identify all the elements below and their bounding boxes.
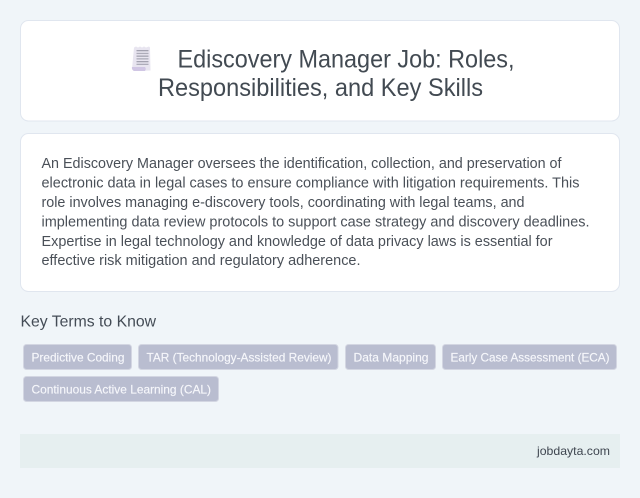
- footer bar: [20, 434, 620, 468]
- title: Responsibilities, and Key Skills: [158, 74, 483, 102]
- panel: description card: [20, 134, 620, 292]
- title: Ediscovery Manager Job: Roles,: [178, 46, 514, 74]
- text block: description: Expertise in legal technology and knowledge of data privacy laws is essential for: [42, 234, 553, 250]
- text block: description: electronic data in legal cases to ensure compliance with litigation requirements. This: [42, 176, 580, 192]
- tag: data mapping: Data Mapping: [354, 350, 428, 364]
- tag: predictive coding: [24, 344, 132, 370]
- text block: description: [42, 156, 590, 269]
- title: [158, 46, 514, 102]
- text block: description: effective risk mitigation and regulatory adherence.: [42, 253, 360, 269]
- tag: TAR: TAR (Technology-Assisted Review): [146, 350, 332, 364]
- tag: continuous active learning: [24, 376, 218, 402]
- heading: key terms: Key Terms to Know: [20, 314, 156, 331]
- tag: TAR: [138, 344, 338, 370]
- text block: description: role involves managing e-discovery tools, coordinating with legal teams, and: [42, 195, 524, 211]
- text block: description: An Ediscovery Manager oversees the identification, collection, and preservation of: [42, 156, 562, 172]
- tag: data mapping: [346, 344, 436, 370]
- tag: early case assessment: [442, 344, 616, 370]
- icon: document scroll: [132, 46, 150, 71]
- footer text: site name: jobdayta.com: [536, 444, 610, 458]
- panel: title card: [20, 20, 620, 121]
- tag: predictive coding: Predictive Coding: [32, 350, 124, 364]
- tag list: [24, 344, 616, 402]
- text block: description: implementing data review protocols to support case strategy and discovery deadlines.: [42, 214, 590, 230]
- tag: continuous active learning: Continuous Active Learning (CAL): [32, 382, 211, 396]
- tag: early case assessment: Early Case Assessment (ECA): [450, 350, 610, 364]
